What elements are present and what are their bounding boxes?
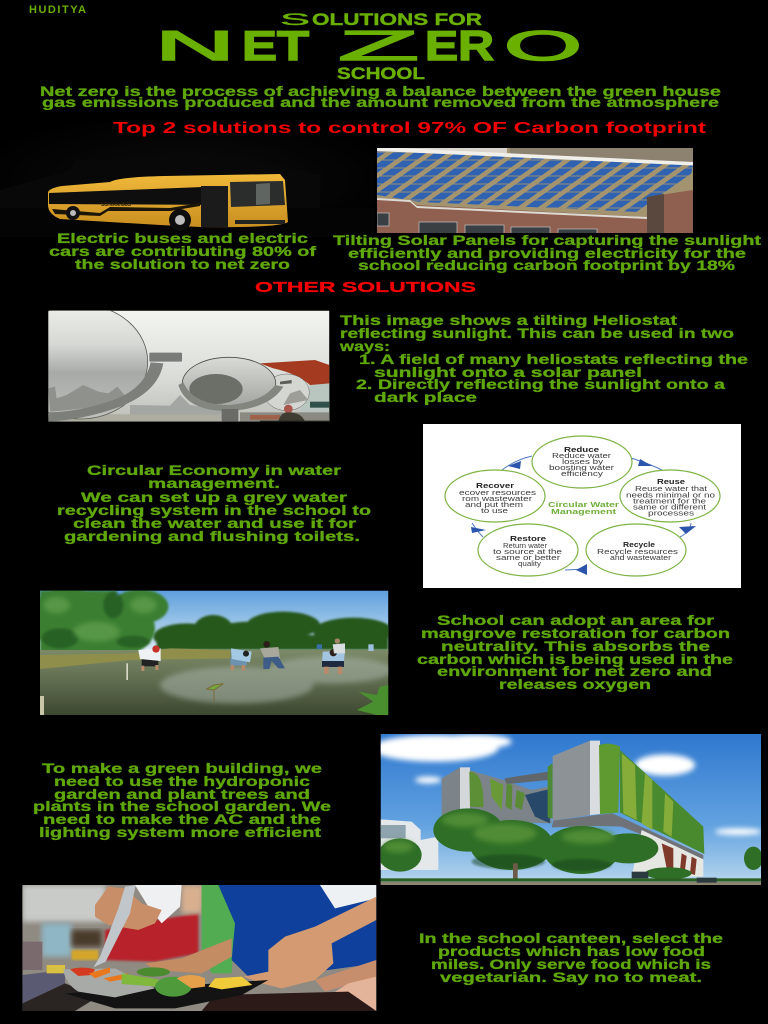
heading: other solutions: OTHER SOLUTIONS bbox=[255, 279, 476, 296]
caption: solar panels: efficiently and providing electricity for the bbox=[348, 246, 747, 261]
photo: heliostat mirrors bbox=[48, 310, 330, 422]
heliostat description: 2. Directly reflecting the sunlight onto a bbox=[356, 377, 726, 392]
caption: electric buses: the solution to net zero bbox=[75, 257, 290, 272]
mangrove text: environment for net zero and bbox=[437, 664, 712, 679]
photo: electric school bus: SCHOOL BUS bbox=[101, 202, 132, 208]
title line: net zero: ER bbox=[425, 22, 494, 69]
heliostat description: reflecting sunlight. This can be used in two bbox=[340, 326, 734, 341]
caption: solar panels bbox=[333, 233, 762, 273]
heliostat description bbox=[339, 313, 749, 405]
circular economy text: gardening and flushing toilets. bbox=[64, 529, 360, 544]
stage: reduce: Reduce water bbox=[552, 451, 612, 460]
title line: net zero: Z bbox=[338, 22, 419, 69]
mangrove text bbox=[417, 613, 734, 692]
stage: restore: Return water bbox=[503, 541, 548, 550]
green building text bbox=[33, 761, 332, 840]
stage: restore: quality bbox=[518, 559, 541, 568]
green building text: To make a green building, we bbox=[42, 761, 323, 776]
diagram centre label: Management bbox=[551, 507, 617, 516]
intro text: gas emissions produced and the amount removed from the atmosphere bbox=[42, 95, 720, 110]
arrows between stages bbox=[471, 456, 696, 575]
stage: restore: same or better bbox=[496, 553, 561, 562]
heliostat description: dark place bbox=[374, 390, 478, 405]
heliostat description: ways: bbox=[339, 339, 390, 354]
stage: reuse bbox=[620, 470, 720, 522]
diagram: circular water management bbox=[423, 424, 741, 588]
mangrove text: neutrality. This absorbs the bbox=[441, 639, 711, 654]
intro text: Net zero is the process of achieving a balance between the green house bbox=[40, 84, 722, 99]
stage: reduce: losses by bbox=[562, 457, 603, 466]
title line: net zero: N bbox=[155, 22, 235, 69]
stage: recover bbox=[445, 470, 545, 522]
green building text: need to use the hydroponic bbox=[54, 774, 311, 789]
heliostat description: 1. A field of many heliostats reflecting the bbox=[359, 352, 749, 367]
heliostat description: This image shows a tilting Heliostat bbox=[340, 313, 678, 328]
stage: reduce: Reduce bbox=[564, 445, 599, 454]
title line: net zero: ET bbox=[242, 22, 309, 69]
title line: solutions for: OLUTIONS FOR bbox=[312, 10, 482, 29]
title line: solutions for: S bbox=[280, 10, 310, 29]
caption: electric buses bbox=[49, 231, 317, 272]
stage: recycle: Recycle resources bbox=[597, 547, 678, 556]
stage: reduce: boosting water bbox=[549, 463, 615, 472]
stage: recycle bbox=[586, 524, 686, 576]
canteen text bbox=[419, 931, 724, 985]
stage: recover: ecover resources bbox=[459, 488, 536, 497]
circular economy text: clean the water and use it for bbox=[73, 516, 357, 531]
photo: tilted solar panels bbox=[377, 147, 693, 235]
stage: reuse: Reuse bbox=[657, 477, 685, 486]
caption: electric buses: Electric buses and electric bbox=[57, 231, 309, 246]
caption: electric buses: cars are contributing 80% of bbox=[49, 244, 317, 259]
circular economy text: We can set up a grey water bbox=[81, 490, 348, 505]
caption: solar panels: Tilting Solar Panels for capturing the sunlight bbox=[333, 233, 762, 248]
circular economy text: Circular Economy in water bbox=[87, 463, 342, 478]
canteen text: products which has low food bbox=[438, 944, 705, 959]
stage: restore bbox=[478, 524, 578, 576]
green building text: need to make the AC and the bbox=[43, 812, 322, 827]
stage: reuse: treatment for the bbox=[633, 496, 706, 506]
canteen text: In the school canteen, select the bbox=[419, 931, 724, 946]
caption: solar panels: school reducing carbon footprint by 18% bbox=[358, 258, 735, 273]
planters in the water bbox=[138, 638, 374, 674]
canteen text: miles. Only serve food which is bbox=[431, 957, 711, 972]
intro text bbox=[40, 84, 722, 110]
title line: school: SCHOOL bbox=[337, 64, 425, 83]
stage: recycle: Recycle bbox=[623, 540, 655, 549]
stage: restore: Restore bbox=[510, 534, 546, 543]
photo: school canteen food bbox=[22, 885, 376, 1011]
stage: recover: to use bbox=[481, 506, 508, 515]
stage: recycle: and wastewater bbox=[610, 553, 672, 562]
stage: restore: to source at the bbox=[493, 547, 562, 556]
stage: reuse: Reuse water that bbox=[635, 484, 708, 493]
mangrove text: releases oxygen bbox=[499, 677, 651, 692]
stage: reuse: processes bbox=[648, 508, 694, 518]
stage: recover: rom wastewater bbox=[462, 494, 533, 503]
photo: green school building bbox=[372, 734, 763, 885]
stage: recover: and put them bbox=[465, 500, 523, 509]
title bbox=[155, 10, 582, 83]
canteen text: vegetarian. Say no to meat. bbox=[440, 970, 702, 985]
stage: reduce: efficiency bbox=[561, 469, 603, 478]
heading: top 2 solutions: Top 2 solutions to control 97% OF Carbon footprint bbox=[113, 120, 706, 137]
diagram centre label: Circular Water bbox=[548, 500, 619, 509]
stage: reduce bbox=[532, 436, 632, 488]
stage: recover: Recover bbox=[476, 481, 514, 490]
green building text: plants in the school garden. We bbox=[33, 799, 332, 814]
circular economy text bbox=[57, 463, 371, 544]
stage: reuse: needs minimal or no bbox=[626, 490, 715, 500]
photo: electric school bus bbox=[0, 122, 375, 237]
mangrove text: School can adopt an area for bbox=[437, 613, 715, 628]
green building text: garden and plant trees and bbox=[54, 787, 310, 802]
mangrove text: carbon which is being used in the bbox=[417, 652, 734, 667]
stage: reuse: same or different bbox=[633, 502, 707, 512]
author label: HUDITYA bbox=[29, 4, 86, 16]
mangrove text: mangrove restoration for carbon bbox=[421, 626, 730, 641]
green building text: lighting system more efficient bbox=[39, 825, 322, 840]
circular economy text: management. bbox=[148, 476, 280, 491]
title line: net zero: O bbox=[504, 22, 582, 69]
heliostat description: sunlight onto a solar panel bbox=[374, 365, 642, 380]
photo: mangrove restoration bbox=[30, 587, 393, 715]
diagram centre label bbox=[548, 500, 619, 516]
circular economy text: recycling system in the school to bbox=[57, 503, 371, 518]
